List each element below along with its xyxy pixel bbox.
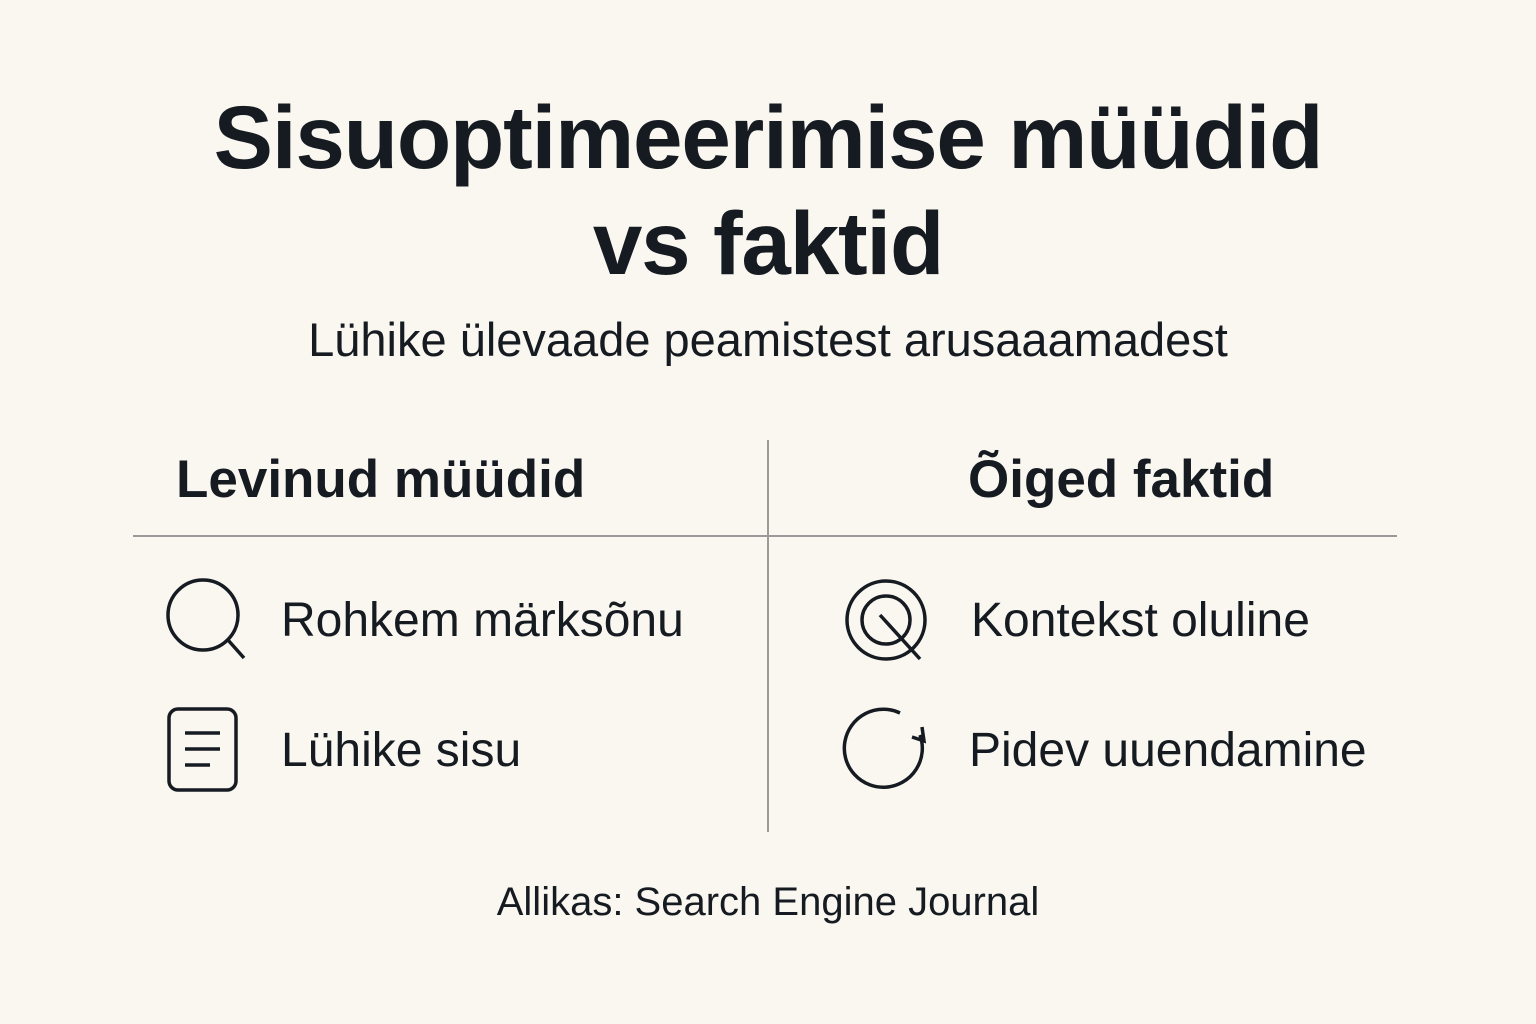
text: Pidev uuendamine — [969, 724, 1367, 777]
icon: refresh — [842, 708, 926, 789]
text: Lühike sisu — [281, 724, 521, 777]
icon: target — [845, 579, 927, 661]
text: Rohkem märksõnu — [281, 594, 684, 647]
title: vs faktid — [593, 193, 943, 293]
row: fact 1 — [845, 579, 1310, 661]
row: fact 2 — [842, 708, 1367, 789]
title — [214, 87, 1322, 293]
row: myth 2 — [167, 707, 521, 792]
icon: document — [167, 707, 238, 792]
subtitle: Lühike ülevaade peamistest arusaaamadest — [308, 313, 1228, 366]
text: Kontekst oluline — [971, 594, 1310, 647]
title: Sisuoptimeerimise müüdid — [214, 87, 1322, 187]
column heading: facts: Õiged faktid — [968, 450, 1274, 509]
column heading: myths: Levinud müüdid — [176, 450, 585, 509]
source: Allikas: Search Engine Journal — [497, 880, 1039, 924]
row: myth 1 — [166, 578, 684, 660]
icon: magnifier — [166, 578, 246, 660]
